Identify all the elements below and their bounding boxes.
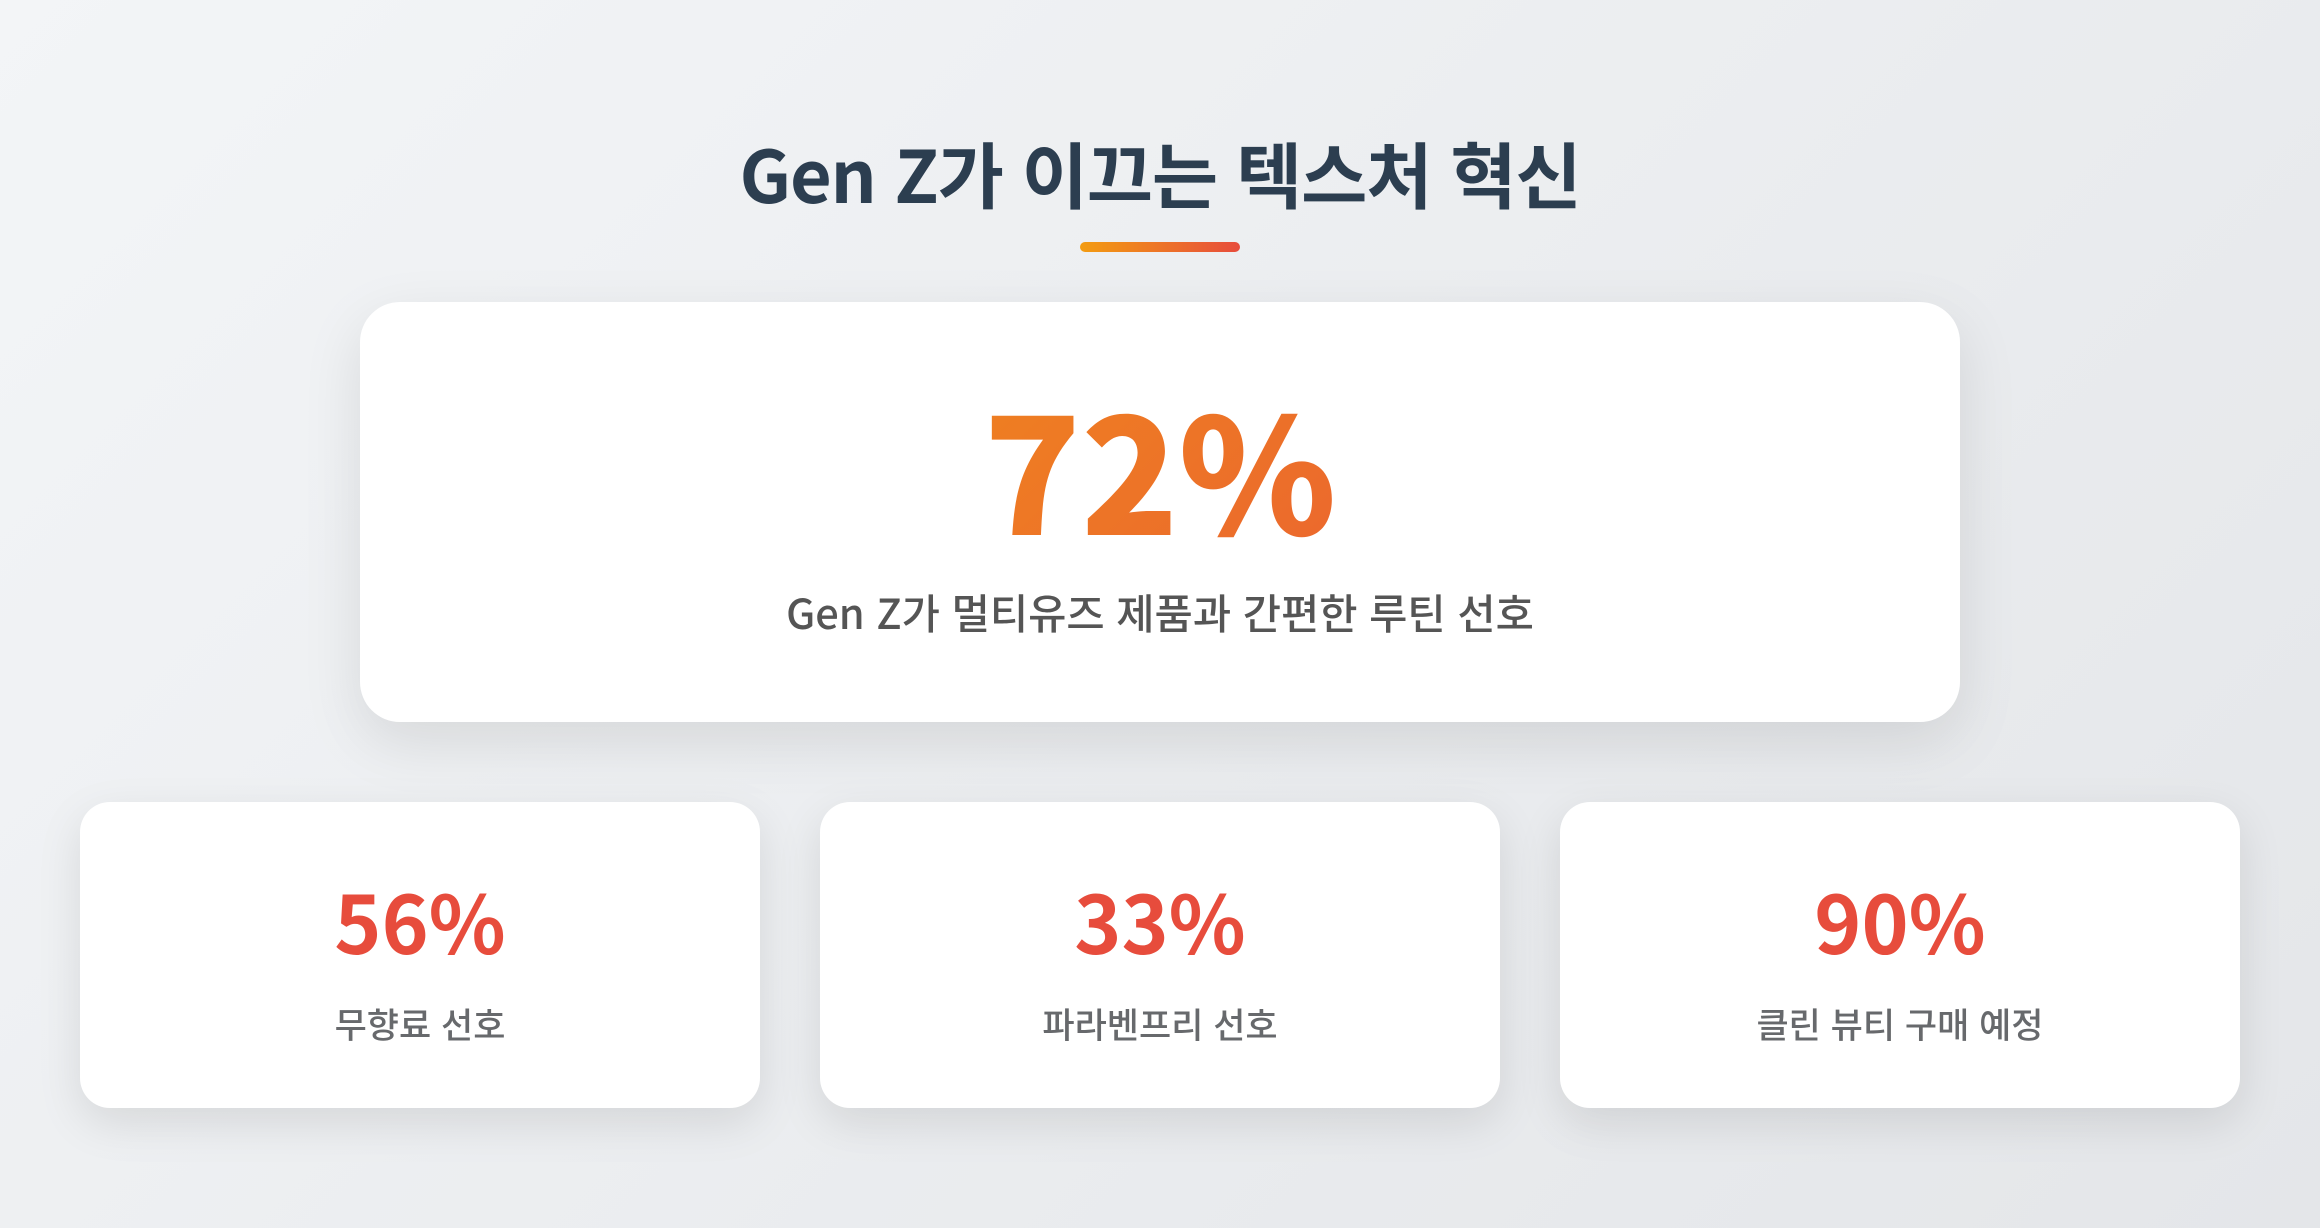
panel: main statistic bbox=[360, 302, 1960, 722]
main label: Gen Z가 멀티유즈 제품과 간편한 루틴 선호 bbox=[786, 581, 1534, 641]
panel: fragrance-free bbox=[80, 802, 760, 1108]
title underline bbox=[1080, 242, 1240, 252]
label: 클린 뷰티 구매 예정 bbox=[1756, 998, 2044, 1049]
number: 33%: 33% bbox=[1074, 862, 1246, 978]
number: 56%: 56% bbox=[334, 862, 506, 978]
title: Gen Z가 이끄는 텍스처 혁신 bbox=[740, 119, 1580, 224]
main number: 72%: 72% bbox=[984, 350, 1336, 582]
main number: 72% bbox=[360, 356, 1960, 576]
label: 무향료 선호 bbox=[335, 998, 505, 1049]
panel: paraben-free bbox=[820, 802, 1500, 1108]
panel: clean beauty bbox=[1560, 802, 2240, 1108]
label: 파라벤프리 선호 bbox=[1042, 998, 1278, 1049]
number: 90%: 90% bbox=[1814, 862, 1986, 978]
